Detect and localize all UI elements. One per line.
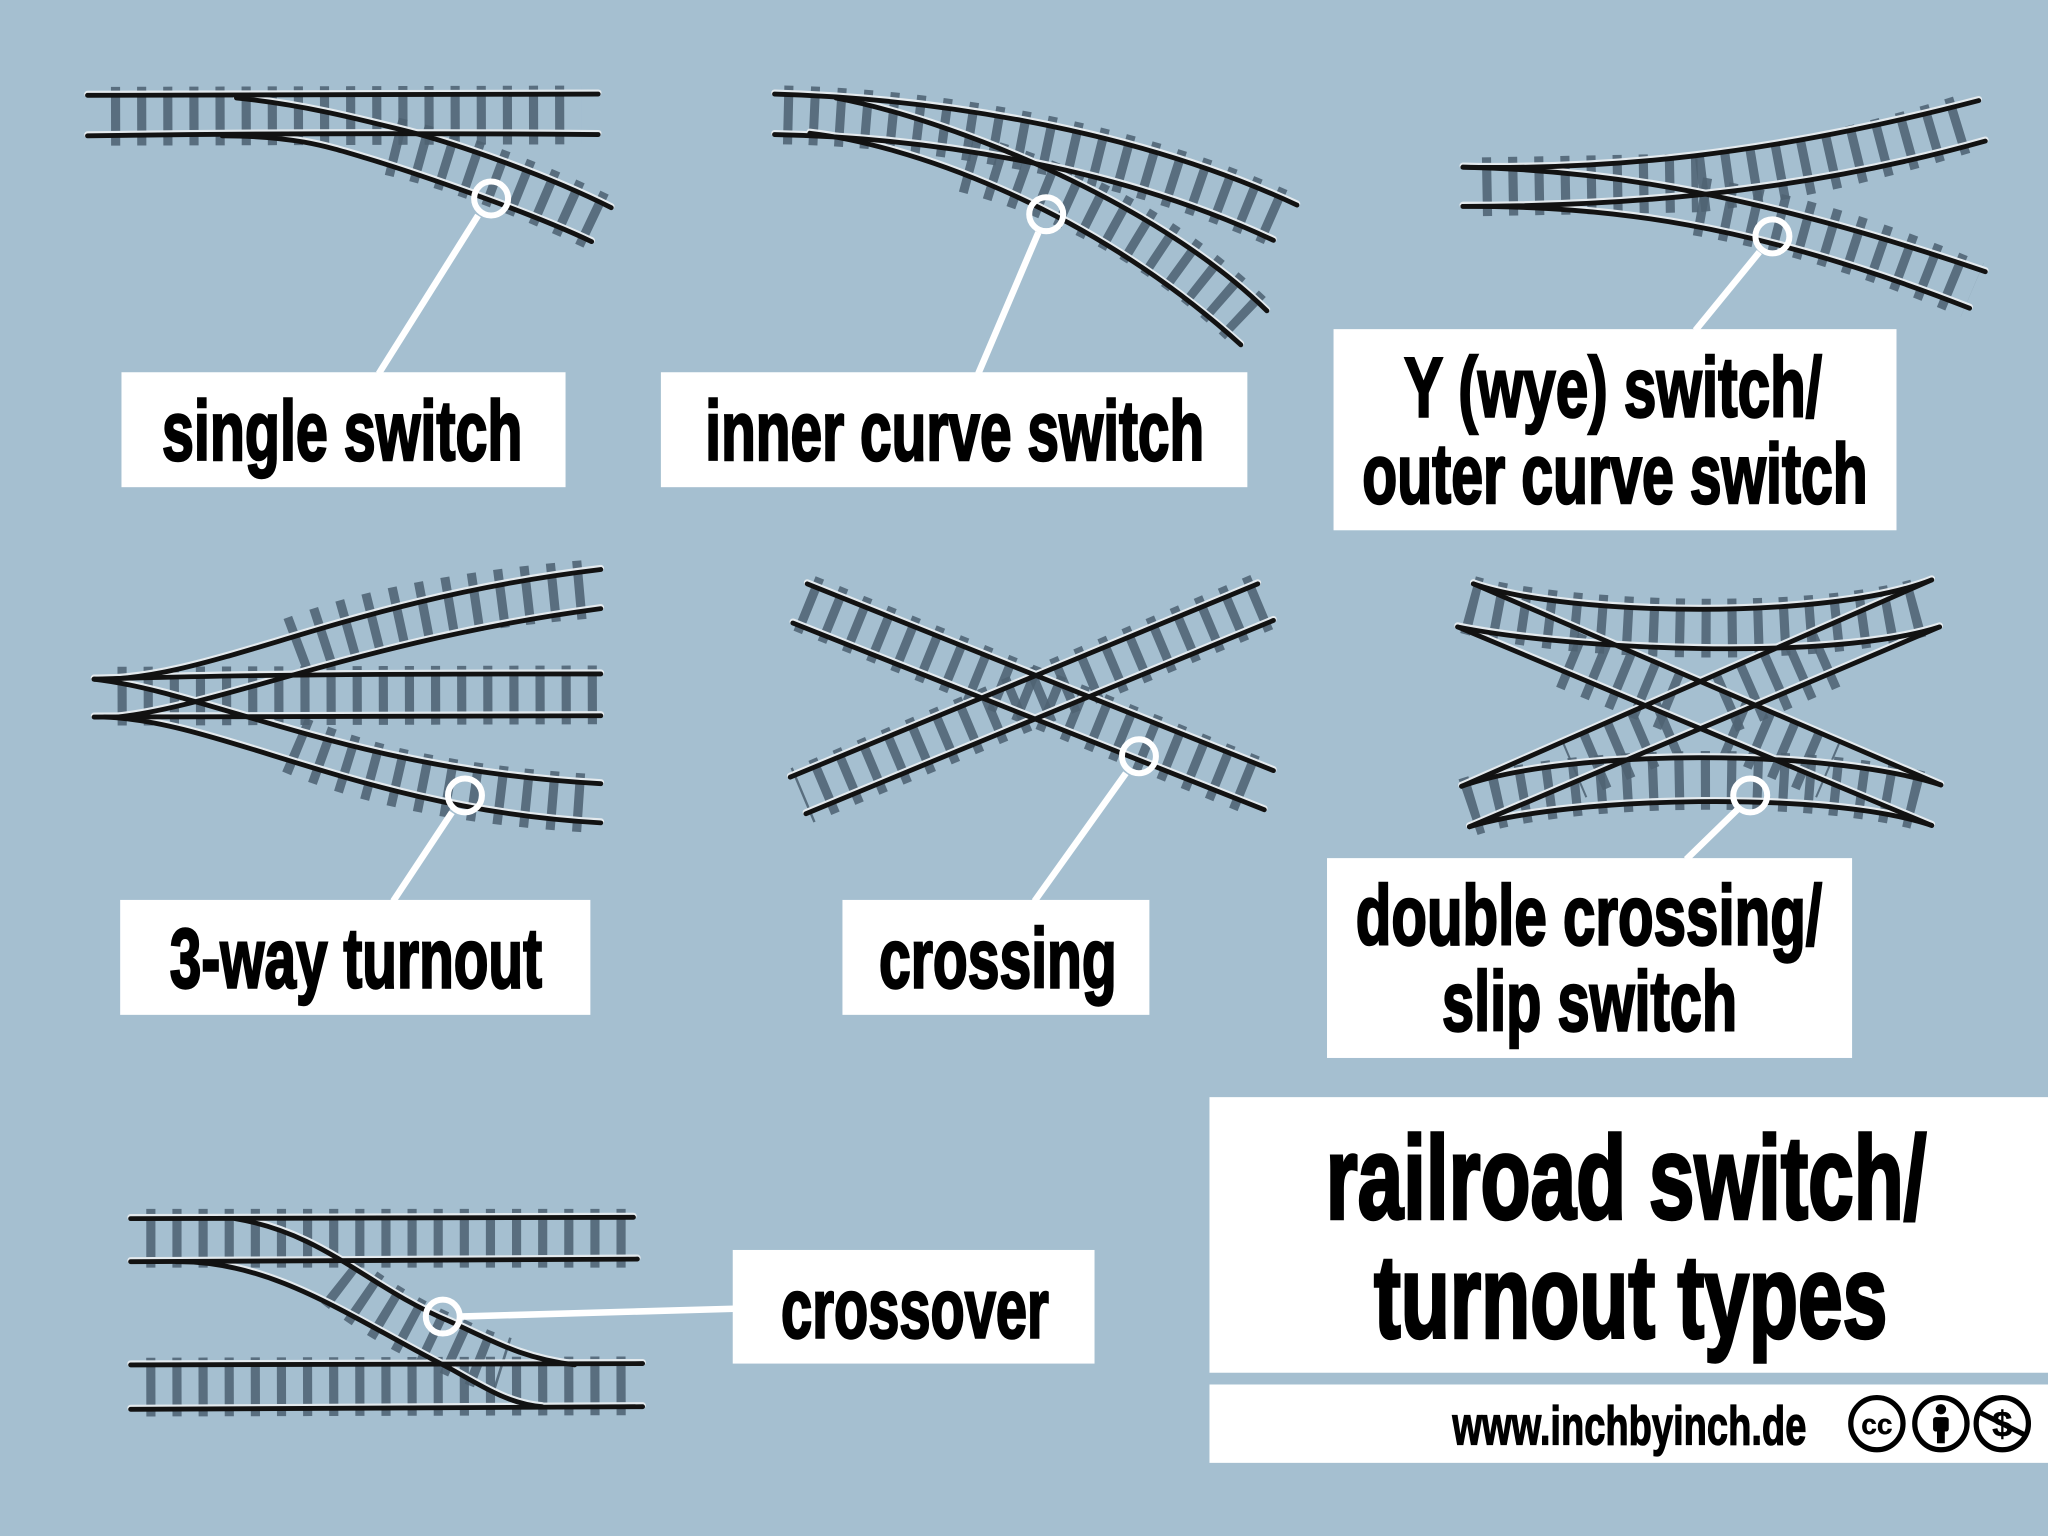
marker and leader line: [978, 197, 1063, 374]
label: single switch: single switch: [162, 383, 522, 478]
label: 3-way turnout: 3-way turnout: [170, 910, 542, 1005]
label: crossover: crossover: [781, 1260, 1049, 1355]
panel: crossing: [790, 583, 1273, 1015]
icon: non-commercial: [1976, 1398, 2028, 1450]
label: crossing: [842, 900, 1149, 1015]
label: double crossing / slip switch: double crossing/: [1356, 867, 1822, 962]
panel: 3-way turnout: [94, 568, 601, 1015]
label: inner curve switch: [661, 372, 1247, 487]
label: crossing: crossing: [879, 910, 1117, 1005]
track: single switch: [88, 93, 611, 242]
label: double crossing / slip switch: slip switch: [1442, 954, 1737, 1049]
track: inner curve switch: [775, 93, 1297, 345]
icon: creative commons: [1851, 1398, 1903, 1450]
label: Y (wye) switch / outer curve switch: Y (wye) switch/: [1404, 340, 1822, 435]
label: crossover: [733, 1250, 1095, 1364]
label: Y (wye) switch / outer curve switch: [1334, 329, 1896, 530]
marker and leader line: [1686, 778, 1767, 859]
icon: attribution: [1915, 1398, 1967, 1450]
title: [1209, 1097, 2048, 1373]
label: single switch: [121, 372, 566, 487]
track: crossing: [790, 583, 1273, 814]
marker and leader line: [379, 182, 508, 374]
marker and leader line: [1695, 219, 1789, 330]
marker and leader line: [1034, 739, 1156, 901]
icon: non-commercial: $: [1992, 1404, 2012, 1445]
track: wye switch: [1463, 99, 1985, 308]
track: 3-way turnout: [94, 568, 601, 823]
panel: single switch: [88, 93, 611, 487]
label: double crossing / slip switch: [1327, 858, 1852, 1058]
panel: inner curve switch: [661, 93, 1297, 487]
marker and leader line: [393, 778, 482, 901]
marker and leader line: [426, 1300, 734, 1334]
track: crossover: [131, 1216, 643, 1409]
panel: Y (wye) switch: [1334, 99, 1985, 530]
website url: www.inchbyinch.de: [1452, 1395, 1806, 1457]
label: 3-way turnout: [120, 900, 590, 1015]
label: inner curve switch: inner curve switch: [705, 383, 1204, 478]
panel: double crossing: [1327, 579, 1941, 1058]
icon: creative commons: cc: [1861, 1409, 1893, 1441]
panel: crossover: [131, 1216, 1095, 1409]
footer bar: [1209, 1384, 2048, 1463]
track: double crossing: [1458, 579, 1941, 827]
